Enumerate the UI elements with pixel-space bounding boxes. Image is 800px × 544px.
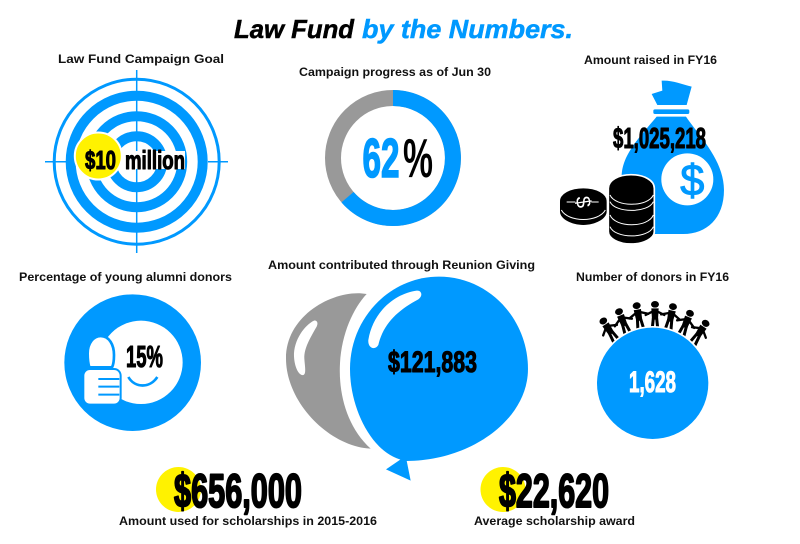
money bag (622, 81, 724, 234)
heading: reunion giving: Amount contributed through Reunion Giving (268, 258, 535, 272)
heading: young alumni donors: Percentage of young alumni donors (19, 270, 232, 284)
heading: amount raised: Amount raised in FY16 (584, 53, 717, 67)
caption: average award: Average scholarship award (474, 514, 635, 528)
icon: balloons with reunion giving amount (286, 277, 528, 481)
heading: campaign progress: Campaign progress as of Jun 30 (299, 65, 491, 79)
icon: thumbs up circle with 15%: 15% (126, 339, 163, 374)
icon: money bag and coins with amount raised (560, 81, 724, 244)
thumb (83, 336, 121, 405)
icon: people on circle with donor count: 1,628 (629, 366, 676, 399)
icon: people on circle with donor count (595, 301, 714, 441)
target chart: $10 million goal: $10 (85, 145, 116, 175)
small coin (560, 188, 607, 225)
caption: scholarships total: Amount used for scholarships in 2015-2016 (119, 514, 377, 528)
grey balloon (286, 293, 371, 449)
icon: balloons with reunion giving amount: $121,883 (388, 346, 477, 379)
heading: campaign goal: Law Fund Campaign Goal (58, 52, 224, 66)
donut chart: 62% progress (333, 98, 453, 218)
coin stack (608, 175, 654, 244)
title (234, 14, 573, 44)
stat: average award: $22,620 (499, 464, 609, 517)
heading: number of donors: Number of donors in FY16 (576, 270, 729, 284)
stat: average award (480, 464, 609, 517)
icon: thumbs up circle with 15% (64, 294, 201, 431)
blue balloon (350, 277, 528, 481)
stat: scholarships total: $656,000 (174, 464, 302, 517)
donut chart: 62% progress: % (403, 127, 433, 189)
small coin: $ (571, 195, 595, 210)
title: by the Numbers. (362, 14, 573, 44)
icon: money bag and coins with amount raised: $1,025,218 (613, 123, 706, 155)
target chart: $10 million goal (45, 70, 228, 253)
people row (595, 301, 714, 352)
money bag: $ (680, 157, 704, 205)
donut chart: 62% progress: 62 (362, 127, 400, 189)
stat: scholarships total (156, 464, 302, 517)
target chart: $10 million goal: million (125, 145, 185, 175)
title: Law Fund (234, 14, 355, 44)
